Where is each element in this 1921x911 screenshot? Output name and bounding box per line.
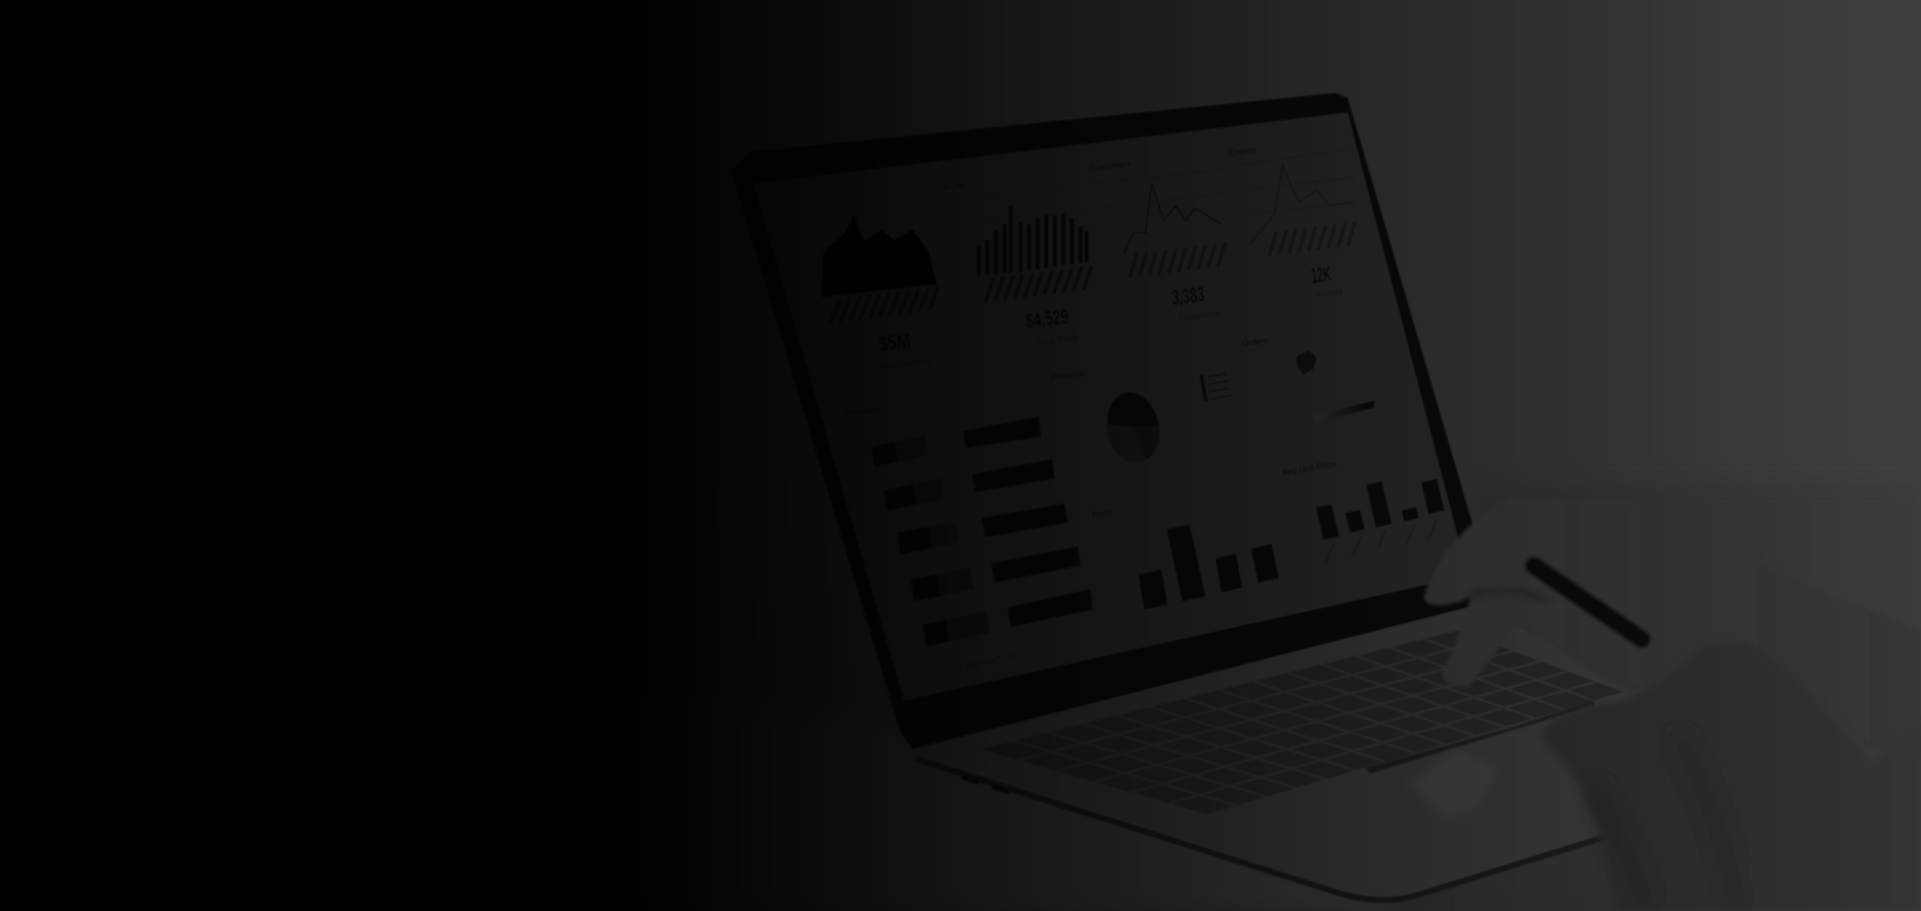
- section titles: Orders: [1229, 144, 1256, 157]
- KPI label: orders: Orders: [1316, 286, 1343, 300]
- KPI value: total profit: $4,529: [1024, 305, 1070, 333]
- finger shadows: [1593, 735, 1740, 911]
- horizontal stacked bars: [871, 416, 1093, 647]
- chart grid lines: [949, 149, 1357, 227]
- KPI label: customers: Customers: [1179, 308, 1221, 323]
- section titles: Avg Unit Price: [1281, 459, 1337, 477]
- KPI value: orders: 12K: [1310, 263, 1332, 288]
- section titles: Revenue: [1050, 367, 1086, 382]
- section titles: Revenue: [844, 404, 880, 418]
- area chart: [821, 214, 937, 298]
- pie legend: [1199, 373, 1232, 401]
- dark spacebar row: [1366, 700, 1595, 774]
- section titles: Orders: [1241, 335, 1269, 349]
- pie chart: [1100, 387, 1166, 468]
- spacebar reflection on trackpad: [1409, 749, 1497, 818]
- KPI label: total revenue: Total Revenue: [876, 355, 932, 372]
- KPI value: total revenue: $5M: [877, 330, 912, 356]
- bar chart: profit: [979, 206, 1087, 277]
- laptop: [731, 93, 1642, 901]
- laptop base: [913, 600, 1642, 901]
- hatch under orders chart: [1269, 222, 1355, 256]
- hatch under customers chart: [1130, 242, 1225, 278]
- section titles: [844, 144, 1337, 520]
- stacked bar legend: Chair Table Fan Tv Pc: [944, 650, 1017, 675]
- profit bar chart: [1138, 524, 1279, 610]
- section titles: Profit: [942, 181, 964, 193]
- finger shading: [1470, 589, 1546, 602]
- stylus pen: [1534, 566, 1642, 639]
- KPI label: total profit: Total Profit: [1037, 332, 1079, 347]
- world map blob: [1296, 350, 1317, 375]
- second hand in foreground: [1541, 640, 1921, 911]
- hatch under bar chart: [985, 266, 1092, 302]
- hatch under area chart: [831, 287, 938, 323]
- side ports: [962, 776, 1010, 792]
- section titles: Profit: [1092, 507, 1113, 520]
- keyboard: [980, 631, 1623, 814]
- section titles: Customers: [1089, 158, 1132, 173]
- KPI value: customers: 3,383: [1170, 283, 1206, 310]
- axis tick labels: [1326, 519, 1437, 563]
- hand holding pen, index finger pressing key: [1424, 497, 1921, 759]
- line chart: customers: [1123, 184, 1221, 255]
- average unit price bar chart: [1316, 479, 1444, 540]
- dashboard screen: [753, 113, 1468, 700]
- laptop base front edge: [916, 759, 1611, 900]
- laptop lid: [731, 93, 1497, 749]
- line chart: orders: [1250, 165, 1354, 245]
- gradient map legend: [1315, 400, 1375, 422]
